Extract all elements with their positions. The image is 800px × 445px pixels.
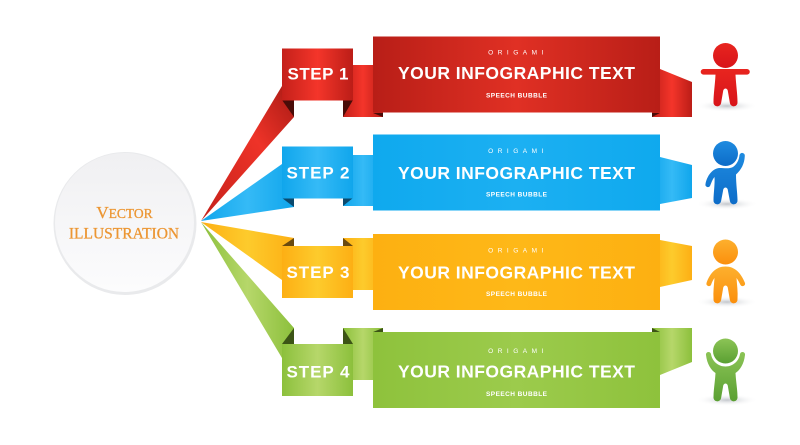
main banner: [373, 332, 660, 408]
banner text: [398, 50, 635, 100]
icon: red figure arms out: [696, 43, 758, 112]
banner text: SPEECH BUBBLE: [486, 192, 548, 198]
connector fold: [343, 328, 383, 380]
main banner: [373, 134, 660, 210]
banner text: YOUR INFOGRAPHIC TEXT: [398, 163, 635, 183]
circle label: ECTOR: [109, 206, 153, 221]
banner text: YOUR INFOGRAPHIC TEXT: [398, 362, 635, 382]
step box: [282, 246, 353, 298]
banner text: ORIGAMI: [488, 248, 548, 254]
right tail: [652, 328, 692, 375]
step label: STEP 2: [286, 164, 350, 182]
banner text: [398, 248, 635, 298]
banner text: YOUR INFOGRAPHIC TEXT: [398, 63, 635, 83]
banner text: [398, 148, 635, 198]
banner text: ORIGAMI: [488, 348, 548, 355]
pointer tail to hub: [201, 222, 294, 358]
banner text: SPEECH BUBBLE: [486, 291, 548, 298]
right tail: [652, 157, 692, 204]
step label: STEP 3: [286, 263, 350, 282]
banner text: YOUR INFOGRAPHIC TEXT: [398, 262, 635, 282]
banner text: [398, 348, 635, 398]
connector fold: [343, 155, 383, 206]
panel: step 4 green ribbon: [201, 222, 692, 408]
banner text: SPEECH BUBBLE: [486, 92, 548, 100]
icon: green figure arms raised: [696, 338, 758, 406]
pointer tail to hub: [201, 222, 294, 280]
step box: [282, 146, 353, 198]
right tail: [652, 69, 692, 117]
main banner: [373, 234, 660, 310]
step label: STEP 1: [288, 64, 348, 84]
circle label: V: [96, 203, 109, 222]
main banner: [373, 36, 660, 112]
step box: [282, 48, 353, 100]
circle label: ILLUSTRATION: [69, 226, 179, 242]
step box: [282, 344, 353, 396]
panel: step 1 red ribbon: [201, 36, 692, 221]
panel: step 3 yellow ribbon: [201, 222, 692, 310]
banner text: ORIGAMI: [488, 148, 548, 155]
banner text: ORIGAMI: [488, 50, 548, 56]
pointer tail to hub: [201, 164, 294, 221]
step label: STEP 4: [286, 362, 350, 382]
central circle: Vector Illustration: [54, 152, 196, 295]
banner text: SPEECH BUBBLE: [486, 391, 548, 398]
connector fold: [343, 238, 383, 290]
connector fold: [343, 65, 383, 117]
panel: step 2 blue ribbon: [201, 134, 692, 221]
pointer tail to hub: [201, 86, 294, 221]
right tail: [652, 240, 692, 287]
icon: orange figure arms down: [696, 240, 758, 308]
icon: blue figure waving: [696, 141, 758, 210]
